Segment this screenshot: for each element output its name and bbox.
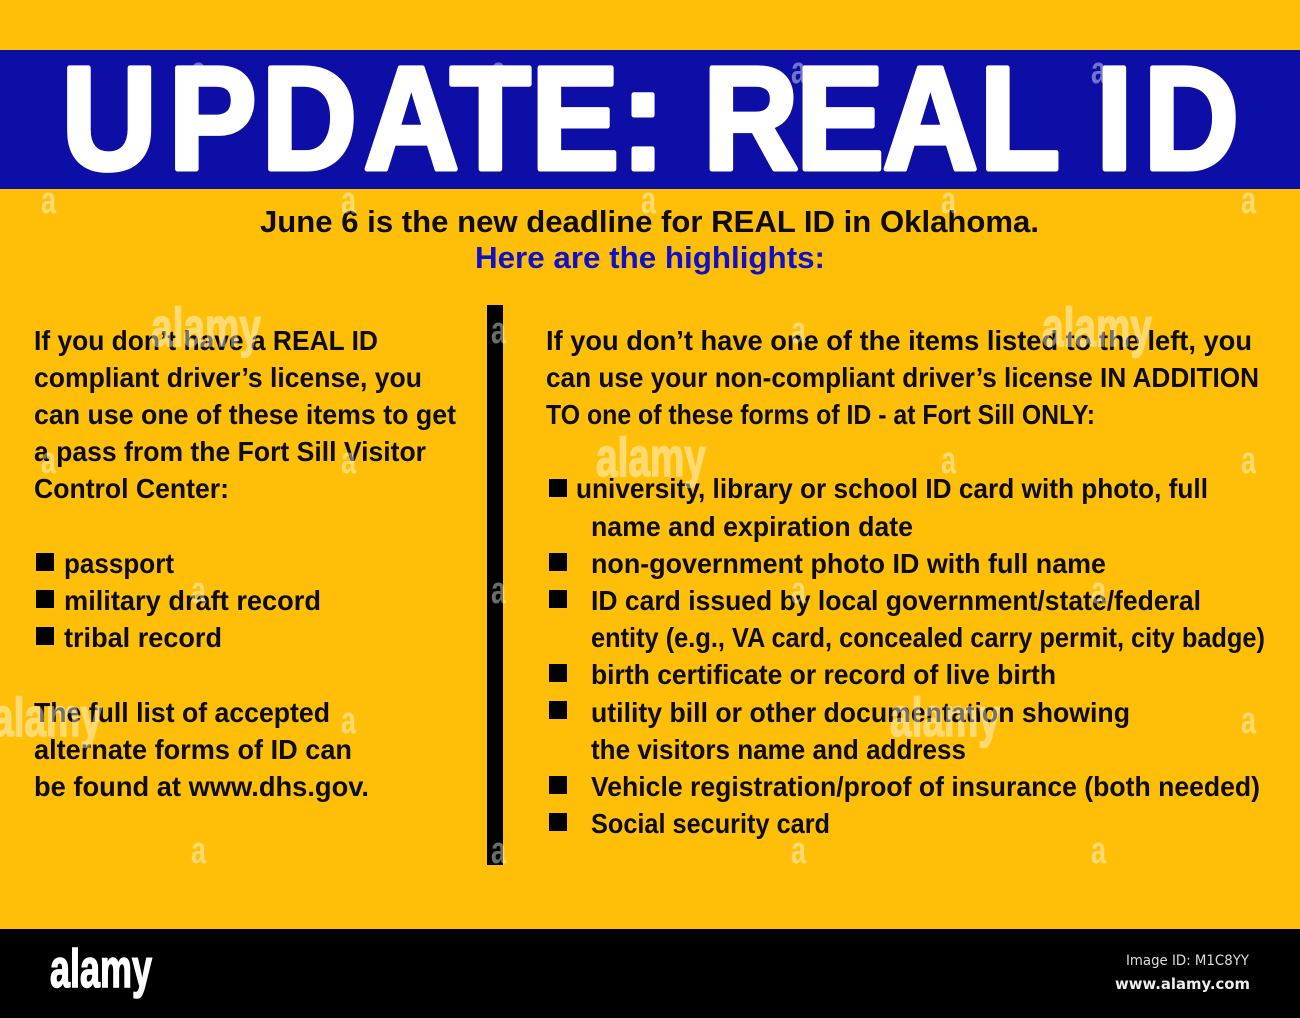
watermarks: a — [941, 180, 957, 222]
watermarks: a — [341, 700, 357, 742]
watermarks: a — [341, 180, 357, 222]
left column text: can use one of these items to get — [34, 399, 456, 430]
right column intro: can use your non-compliant driver’s license IN ADDITION — [546, 362, 1259, 393]
footer bar — [0, 929, 1300, 1018]
watermarks: a — [341, 440, 357, 482]
watermarks: a — [41, 180, 57, 222]
subtitle: June 6 is the new deadline for REAL ID in Oklahoma. — [260, 204, 1039, 239]
left column text: compliant driver’s license, you — [34, 362, 422, 393]
watermarks: a — [191, 830, 207, 872]
vertical divider — [487, 305, 503, 865]
footer logo: alamy — [50, 939, 152, 999]
title banner: UPDATE: REAL ID — [61, 36, 1239, 201]
watermarks: a — [491, 310, 507, 352]
watermarks: a — [1241, 180, 1257, 222]
left footnote: alternate forms of ID can — [34, 734, 352, 765]
right bullet list: utility bill or other documentation showing — [591, 697, 1130, 728]
right bullet list: name and expiration date — [591, 511, 913, 542]
watermarks: a — [641, 180, 657, 222]
watermarks: a — [1241, 440, 1257, 482]
watermarks: alamy — [1042, 296, 1152, 358]
right bullet list: ID card issued by local government/state/federal — [591, 585, 1201, 616]
watermarks: a — [1091, 830, 1107, 872]
right bullet list: Social security card — [591, 808, 830, 839]
left footnote: The full list of accepted — [34, 697, 330, 728]
watermarks: alamy — [890, 686, 1000, 748]
right bullet list — [549, 473, 1265, 839]
watermarks: alamy — [151, 296, 261, 358]
left column text: a pass from the Fort Sill Visitor — [34, 436, 426, 467]
footer image id: Image ID: M1C8YY — [1126, 953, 1249, 969]
watermarks: a — [491, 830, 507, 872]
subtitle — [260, 204, 1039, 275]
watermarks: a — [191, 570, 207, 612]
left column text: Control Center: — [34, 473, 229, 504]
watermarks: a — [791, 570, 807, 612]
watermarks: a — [191, 50, 207, 92]
watermarks: a — [1091, 570, 1107, 612]
left bullet list: military draft record — [64, 585, 321, 616]
left bullet list: tribal record — [64, 622, 222, 653]
left column text: If you don’t have a REAL ID — [34, 325, 378, 356]
watermarks: a — [491, 570, 507, 612]
right bullet list: university, library or school ID card with photo, full — [576, 473, 1208, 504]
watermarks: a — [491, 50, 507, 92]
watermarks: a — [1091, 50, 1107, 92]
watermarks: a — [1241, 700, 1257, 742]
subtitle: Here are the highlights: — [475, 240, 825, 275]
watermarks: a — [941, 440, 957, 482]
left footnote — [34, 697, 369, 802]
watermarks: a — [791, 50, 807, 92]
right column intro: If you don’t have one of the items listed to the left, you — [546, 325, 1252, 356]
right bullet list: birth certificate or record of live birth — [591, 659, 1056, 690]
watermarks: a — [791, 830, 807, 872]
watermarks: alamy — [596, 426, 706, 488]
watermarks: a — [41, 440, 57, 482]
footer image id — [1115, 953, 1250, 993]
footer image id: www.alamy.com — [1115, 975, 1250, 993]
left bullet list: passport — [64, 548, 174, 579]
right bullet list: the visitors name and address — [591, 734, 966, 765]
right column intro: TO one of these forms of ID - at Fort Sill ONLY: — [546, 399, 1095, 430]
right bullet list: Vehicle registration/proof of insurance (both needed) — [591, 771, 1260, 802]
left column text — [34, 325, 456, 504]
right column intro — [546, 325, 1259, 430]
watermarks — [0, 50, 1257, 872]
watermarks: a — [791, 310, 807, 352]
right bullet list: non-government photo ID with full name — [591, 548, 1106, 579]
left bullet list — [36, 548, 321, 653]
left footnote: be found at www.dhs.gov. — [34, 771, 369, 802]
